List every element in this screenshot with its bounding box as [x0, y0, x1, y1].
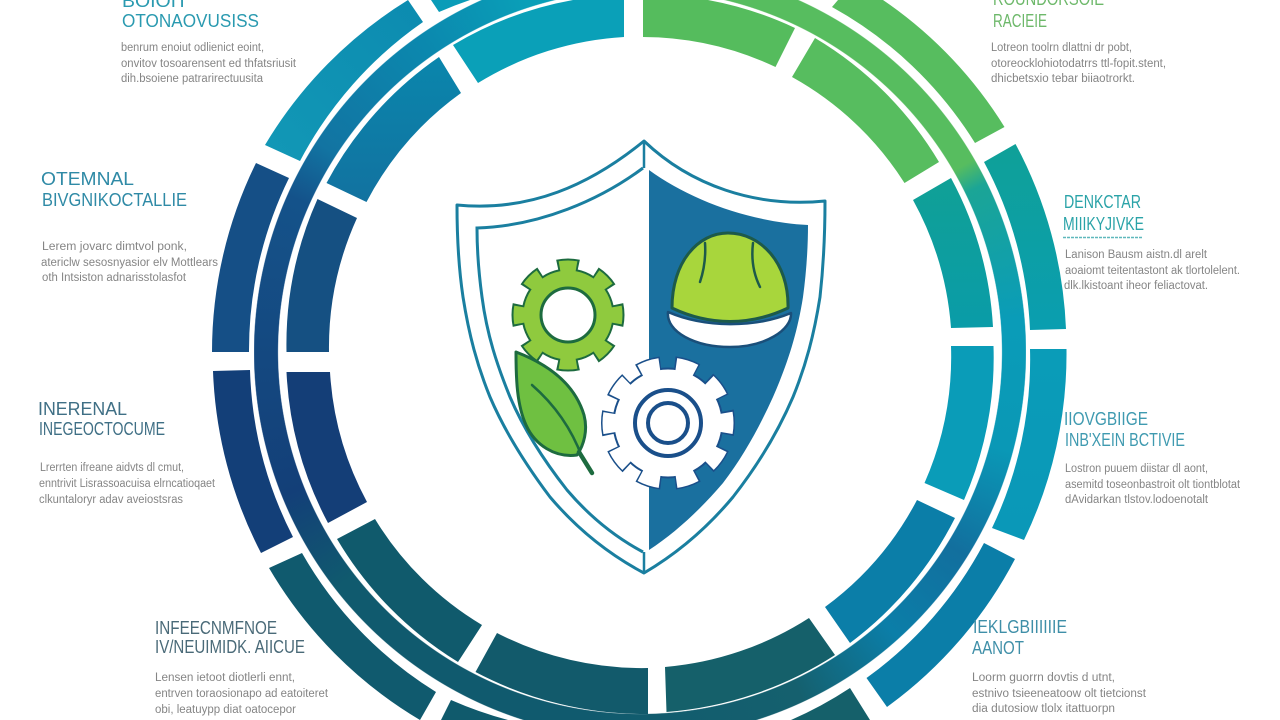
heading [41, 169, 187, 210]
heading: IIOVGBIIGE [1064, 409, 1148, 429]
body text [991, 42, 1166, 85]
body text [1065, 463, 1241, 506]
heading: INEGEOCTOCUME [39, 419, 165, 439]
heading [122, 0, 259, 31]
middle ring [254, 0, 1026, 720]
heading: BIVGNIKOCTALLIE [42, 190, 187, 210]
green gear [518, 265, 618, 365]
body text [121, 42, 297, 85]
shield inner outline left [477, 168, 643, 552]
body text: dAvidarkan tlstov.lodoenotalt [1065, 494, 1209, 506]
heading: INFEECNMFNOE [155, 618, 277, 638]
white gear [608, 363, 728, 483]
body text: clkuntaloryr adav aveiostsras [39, 494, 183, 506]
heading [993, 0, 1104, 31]
heading: INERENAL [38, 399, 127, 419]
green leaf [516, 352, 592, 473]
heading [1064, 409, 1185, 450]
panel: upper left [41, 169, 218, 284]
heading: AANOT [972, 638, 1024, 658]
body text: dih.bsoiene patrarirectuusita [121, 73, 264, 85]
panel: bottom right [972, 617, 1147, 715]
panel: top right [991, 0, 1166, 85]
heading: OTONAOVUSISS [122, 11, 259, 31]
body text: asemitd toseonbastroit olt tiontblotat [1065, 479, 1241, 491]
heading [972, 617, 1067, 658]
body text: onvitov tosoarensent ed thfatsriusit [121, 58, 297, 70]
body text [155, 672, 329, 716]
body text: Lotreon toolrn dlattni dr pobt, [991, 42, 1132, 54]
central shield [457, 141, 825, 573]
heading: MIIIKYJIVKE [1063, 214, 1144, 234]
heading: DENKCTAR [1064, 192, 1141, 212]
panel: upper right [1063, 192, 1240, 292]
shield blue half [649, 170, 808, 550]
heading: RACIEIE [993, 11, 1047, 31]
hard hat [668, 233, 791, 347]
heading underline [1063, 236, 1143, 238]
body text: obi, leatuypp diat oatocepor [155, 704, 296, 716]
body text: Lerem jovarc dimtvol ponk, [42, 241, 187, 253]
body text: enntrivit Lisrassoacuisa elrncatioqaet [39, 478, 216, 490]
heading: IV/NEUIMIDK. AIICUE [155, 637, 305, 657]
body text: dhicbetsxio tebar biiaotrorkt. [991, 73, 1135, 85]
outer ring segments [212, 0, 1067, 720]
body text: Lostron puuem diistar dl aont, [1065, 463, 1208, 475]
heading [1063, 192, 1144, 234]
body text: dia dutosiow tlolx itattuorpn [972, 703, 1115, 715]
body text: benrum enoiut odlienict eoint, [121, 42, 264, 54]
heading [38, 399, 165, 439]
panel: bottom left [155, 618, 329, 716]
body text [39, 462, 216, 506]
panel: lower left [38, 399, 216, 506]
body text: atericlw sesosnyasior elv Mottlears [41, 257, 218, 269]
body text: Lrerrten ifreane aidvts dl cmut, [40, 462, 184, 474]
panel: top left [121, 0, 297, 85]
body text: oth Intsiston adnarisstolasfot [42, 272, 187, 284]
heading [155, 618, 305, 657]
body text [41, 241, 218, 284]
body text: Lensen ietoot diotlerli ennt, [155, 672, 295, 684]
body text: Lanison Bausm aistn.dl arelt [1065, 249, 1208, 261]
body text: estnivo tsieeneatoow olt tietcionst [972, 688, 1147, 700]
body text: dlk.lkistoant iheor feliactovat. [1064, 280, 1208, 292]
body text: entrven toraosionapo ad eatoiteret [155, 688, 329, 700]
body text: aoaiomt teitentastont ak tlortolelent. [1065, 265, 1240, 277]
heading: OTEMNAL [41, 169, 134, 189]
heading: INB'XEIN BCTIVIE [1065, 430, 1185, 450]
inner ring segments [286, 0, 994, 714]
panel: lower right [1064, 409, 1241, 506]
body text [972, 672, 1147, 715]
shield outline [457, 141, 825, 573]
body text [1064, 249, 1240, 292]
heading: IEKLGBIIIIIIE [973, 617, 1067, 637]
body text: otoreocklohiotodatrrs ttl-fopit.stent, [991, 58, 1166, 70]
body text: Loorm guorrn dovtis d utnt, [972, 672, 1115, 684]
shield centre lines [643, 141, 645, 573]
